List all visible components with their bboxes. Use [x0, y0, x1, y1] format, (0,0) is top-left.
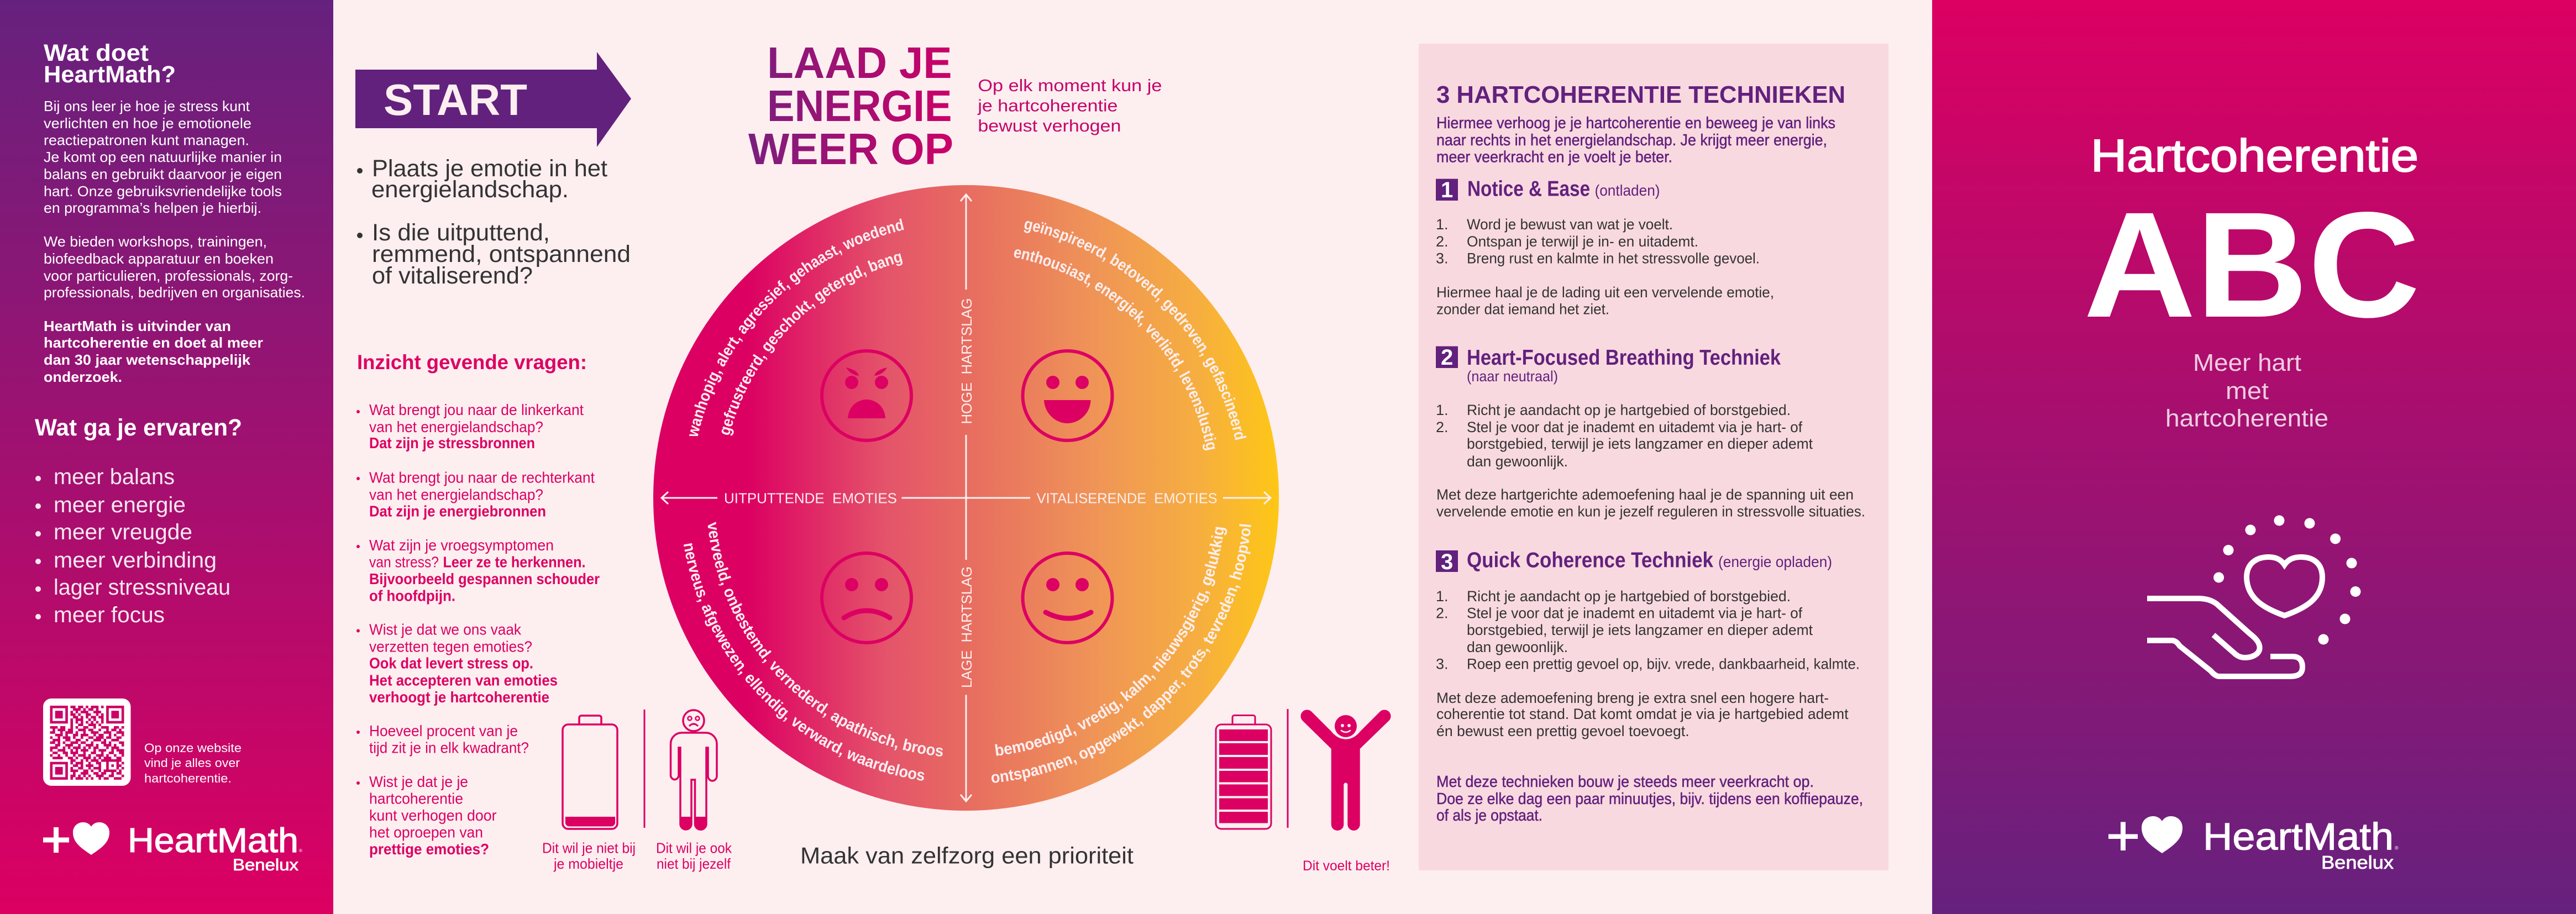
sidebar gradient background	[0, 0, 333, 914]
technique 2: Heart-Focused Breathing: (naar neutraal)	[1467, 368, 1558, 385]
cover title ABC: ABC	[2084, 181, 2420, 349]
list: insight questions: van het energielandschap?	[369, 486, 543, 503]
text: website note	[144, 741, 242, 785]
list: insight questions: prettige emoties?	[369, 841, 489, 858]
technique 1: Notice and Ease: Word je bewust van wat je voelt.	[1467, 216, 1673, 233]
caption: Dit voelt beter: Dit voelt beter!	[1303, 858, 1390, 874]
text block: about HeartMath: verlichten en hoe je emotionele	[44, 115, 251, 132]
text block: start instructions: Plaats je emotie in het	[372, 155, 607, 182]
axis labels: UITPUTTENDE EMOTIES	[724, 490, 897, 506]
icon: laughing face	[1022, 351, 1112, 440]
axis labels: VITALISERENDE EMOTIES	[1037, 490, 1218, 506]
logo: HeartMath Benelux: ®	[299, 848, 302, 853]
technique 3: Quick Coherence: Roep een prettig gevoel op, bijv. vrede, dankbaarheid, kalmte.	[1467, 656, 1860, 673]
technique 2: Heart-Focused Breathing: Heart-Focused Breathing Techniek	[1467, 346, 1781, 370]
circle gradient disc	[653, 185, 1279, 811]
text block: start instructions	[357, 155, 631, 289]
technique 1: Notice and Ease: Notice & Ease	[1467, 177, 1590, 201]
text: Maak van zelfzorg een prioriteit: Maak van zelfzorg een prioriteit	[800, 842, 1134, 869]
technique 3: Quick Coherence: borstgebied, terwijl je iets langzamer en dieper ademt	[1467, 622, 1813, 638]
text block: bold statement	[44, 318, 263, 385]
text block: start instructions: energielandschap.	[371, 176, 569, 203]
heading: Wat doet HeartMath?: Wat doet	[44, 40, 149, 66]
text block: about HeartMath: professionals, bedrijven en organisaties.	[44, 284, 305, 301]
text block: about HeartMath: We bieden workshops, trainingen,	[44, 233, 267, 250]
title: Laad je energie weer op: ENERGIE	[767, 81, 952, 130]
icon: hand holding heart	[2147, 515, 2361, 676]
intro text: naar rechts in het energielandschap. Je krijgt meer energie,	[1436, 132, 1827, 149]
technique 1: Notice and Ease: Hiermee haal je de lading uit een vervelende emotie,	[1436, 284, 1774, 301]
divider: left	[643, 710, 646, 828]
list: insight questions: kunt verhogen door	[369, 807, 496, 824]
title: Laad je energie weer op: LAAD JE	[767, 38, 952, 87]
caption: battery and person	[542, 840, 732, 872]
list: insight questions	[356, 401, 600, 858]
text block: about HeartMath: en programma’s helpen je hierbij.	[44, 199, 261, 216]
list: insight questions: Dat zijn je energiebronnen	[369, 503, 546, 519]
emotion words on arcs: verveeld, onbestemd, vernederd, apathisch, broos	[707, 522, 943, 757]
technique 3: Quick Coherence: Met deze ademoefening breng je extra snel een hogere hart-	[1436, 690, 1829, 706]
chart: energy landscape circle	[653, 185, 1279, 811]
panel background	[1419, 44, 1888, 870]
technique 3: Quick Coherence	[1436, 548, 1860, 739]
list: insight questions: Wat zijn je vroegsymptomen	[369, 537, 554, 554]
icon: full battery	[1216, 715, 1271, 829]
logo: HeartMath Benelux: Benelux	[233, 856, 298, 874]
logo: HeartMath Benelux	[43, 822, 302, 874]
text block: about HeartMath: reactiepatronen kunt managen.	[44, 132, 249, 149]
technique 1: Notice and Ease	[1436, 177, 1774, 317]
list: benefits: meer vreugde	[54, 520, 192, 544]
icon: empty battery	[563, 716, 617, 829]
heading: Inzicht gevende vragen: Inzicht gevende vragen:	[357, 351, 587, 374]
list: insight questions: Wist je dat je je	[369, 773, 468, 790]
technique 1: Notice and Ease: 3.	[1436, 250, 1449, 267]
icon: exhausted person	[671, 710, 717, 829]
cover tagline: hartcoherentie	[2165, 405, 2328, 432]
technique 2: Heart-Focused Breathing: borstgebied, terwijl je iets langzamer en dieper ademt	[1467, 435, 1813, 452]
subtitle: bewust verhogen	[977, 76, 1162, 135]
panel: 3 techniques	[1419, 44, 1888, 870]
emotion words on arcs: enthousiast, energiek, verliefd, levenslustig	[1014, 249, 1216, 450]
list: insight questions: het oproepen van	[369, 824, 483, 841]
emotion words on arcs: bemoedigd, vredig, kalm, nieuwsgierig, gelukkig	[995, 527, 1227, 756]
technique 2: Heart-Focused Breathing: 2	[1441, 345, 1453, 370]
text block: bold statement: hartcoherentie en doet al meer	[44, 334, 263, 351]
cover heading: Hartcoherentie	[2091, 130, 2418, 181]
icon: angry face	[822, 351, 911, 440]
technique 3: Quick Coherence: Stel je voor dat je inademt en uitademt via je hart- of	[1467, 605, 1802, 621]
text block: start instructions: Is die uitputtend,	[372, 219, 550, 246]
list: insight questions: of hoofdpijn.	[369, 587, 455, 605]
list: benefits: meer verbinding	[54, 548, 217, 572]
technique 3: Quick Coherence: 1.	[1436, 588, 1449, 605]
list: insight questions: van het energielandschap?	[369, 418, 543, 435]
list: insight questions: Wat brengt jou naar de rechterkant	[369, 469, 595, 486]
logo: HeartMath Benelux: HeartMath	[2203, 816, 2394, 858]
technique 2: Heart-Focused Breathing: 1.	[1436, 402, 1449, 418]
list: benefits: meer balans	[54, 465, 175, 489]
cover tagline	[2165, 349, 2328, 432]
heading: 3 hartcoherentie technieken: 3 HARTCOHERENTIE TECHNIEKEN	[1436, 81, 1845, 108]
list: insight questions: Bijvoorbeeld gespannen schouder	[369, 570, 600, 587]
emotion words on arcs: ontspannen, opgewekt, dapper, trots, tevreden, hoopvol	[991, 524, 1251, 783]
arrow: START: START	[384, 75, 527, 124]
arrow: START	[355, 52, 631, 147]
logo: HeartMath Benelux: ®	[2395, 845, 2399, 851]
panel: cover	[1932, 0, 2576, 914]
icon: sad face	[822, 553, 911, 643]
caption: battery and person: niet bij jezelf	[657, 855, 731, 872]
panel: left sidebar	[0, 0, 333, 914]
list: insight questions: hartcoherentie	[369, 790, 463, 807]
technique 3: Quick Coherence: dan gewoonlijk.	[1467, 639, 1568, 655]
text block: about HeartMath: balans en gebruikt daarvoor je eigen	[44, 166, 282, 182]
cover tagline: met	[2226, 377, 2269, 405]
text block: about HeartMath: Bij ons leer je hoe je stress kunt	[44, 98, 250, 114]
text block: bold statement: onderzoek.	[44, 369, 122, 385]
subtitle: bewust verhogen: Op elk moment kun je	[978, 76, 1162, 95]
intro text: meer veerkracht en je voelt je beter.	[1436, 148, 1672, 166]
heading: Wat doet HeartMath?: HeartMath?	[44, 61, 176, 88]
technique 3: Quick Coherence: 3	[1441, 550, 1453, 574]
technique 2: Heart-Focused Breathing: Stel je voor dat je inademt en uitademt via je hart- of	[1467, 419, 1802, 435]
list: insight questions: Hoeveel procent van je	[369, 722, 518, 739]
list: insight questions: Dat zijn je stressbronnen	[369, 434, 535, 451]
subtitle: bewust verhogen: bewust verhogen	[978, 116, 1121, 135]
list: insight questions: Wat brengt jou naar de linkerkant	[369, 401, 584, 418]
technique 1: Notice and Ease: zonder dat iemand het ziet.	[1436, 301, 1609, 317]
emotion words on arcs: wanhopig, alert, agressief, gehaast, woedend	[689, 218, 904, 437]
technique 3: Quick Coherence: (energie opladen)	[1718, 553, 1832, 570]
technique 3: Quick Coherence: Quick Coherence Techniek	[1467, 548, 1713, 572]
list: benefits: meer focus	[54, 603, 165, 627]
technique 1: Notice and Ease: 1.	[1436, 216, 1449, 233]
closing advice: Met deze technieken bouw je steeds meer veerkracht op.	[1436, 773, 1814, 791]
text: website note: Op onze website	[144, 741, 242, 755]
title: Laad je energie weer op	[748, 38, 953, 174]
list: insight questions: Het accepteren van emoties	[369, 672, 558, 689]
text block: bold statement: HeartMath is uitvinder van	[44, 318, 231, 334]
list: benefits	[35, 465, 230, 627]
technique 3: Quick Coherence: 2.	[1436, 605, 1449, 621]
icon: energised person	[1300, 710, 1391, 831]
technique 1: Notice and Ease: Ontspan je terwijl je in- en uitademt.	[1467, 233, 1698, 250]
list: insight questions: Leer ze te herkennen.	[443, 554, 586, 571]
technique 3: Quick Coherence: 3.	[1436, 656, 1449, 673]
text block: about HeartMath: voor particulieren, professionals, zorg-	[44, 267, 293, 284]
list: insight questions: tijd zit je in elk kwadrant?	[369, 739, 529, 757]
text block: about HeartMath: Je komt op een natuurlijke manier in	[44, 149, 282, 165]
technique 2: Heart-Focused Breathing: dan gewoonlijk.	[1467, 453, 1568, 470]
logo: HeartMath Benelux: Benelux	[2321, 852, 2394, 873]
list: benefits: lager stressniveau	[54, 575, 230, 600]
cover tagline: Meer hart	[2193, 349, 2301, 376]
text block: start instructions: remmend, ontspannend	[372, 241, 631, 267]
closing advice: of als je opstaat.	[1436, 807, 1543, 824]
technique 2: Heart-Focused Breathing: 2.	[1436, 419, 1449, 435]
axes and arrows	[662, 195, 1271, 801]
text block: about HeartMath	[44, 98, 305, 301]
heading: Wat ga je ervaren?: Wat ga je ervaren?	[35, 414, 242, 441]
axis labels: LAGE HARTSLAG	[958, 566, 975, 688]
emotion words on arcs: gefrustreerd, geschokt, getergd, bang	[722, 253, 903, 435]
caption: battery and person: Dit wil je ook	[656, 840, 732, 857]
technique 2: Heart-Focused Breathing: Met deze hartgerichte ademoefening haal je de spanning uit een	[1436, 486, 1854, 503]
logo: HeartMath Benelux: HeartMath	[128, 822, 298, 860]
technique 3: Quick Coherence: én bewust een prettig gevoel toevoegt.	[1436, 723, 1690, 739]
technique 1: Notice and Ease: 1	[1441, 178, 1453, 202]
list: insight questions: Ook dat levert stress op.	[369, 655, 533, 672]
logo: HeartMath Benelux	[2108, 816, 2399, 873]
list: benefits: meer energie	[54, 493, 186, 517]
technique 1: Notice and Ease: (ontladen)	[1595, 182, 1660, 199]
list: insight questions: verzetten tegen emoties?	[369, 638, 532, 655]
text block: about HeartMath: hart. Onze gebruiksvriendelijke tools	[44, 183, 282, 199]
technique 2: Heart-Focused Breathing: Richt je aandacht op je hartgebied of borstgebied.	[1467, 402, 1791, 418]
text: website note: hartcoherentie.	[144, 771, 232, 785]
caption: battery and person: Dit wil je niet bij	[542, 840, 636, 857]
icon: smiling face	[1022, 553, 1112, 643]
text block: about HeartMath: biofeedback apparatuur en boeken	[44, 250, 274, 267]
technique 2: Heart-Focused Breathing: vervelende emotie en kun je jezelf reguleren in stressvolle situaties.	[1436, 503, 1865, 519]
list: insight questions: verhoogt je hartcoherentie	[369, 689, 549, 706]
emotion words on arcs	[684, 218, 1251, 783]
list: insight questions: Wist je dat we ons vaak	[369, 621, 522, 638]
subtitle: bewust verhogen: je hartcoherentie	[977, 96, 1118, 115]
divider: right	[1287, 709, 1289, 828]
icon: QR code	[43, 698, 130, 786]
axis labels: HOGE HARTSLAG	[958, 298, 975, 424]
list: insight questions: van stress?	[369, 554, 439, 571]
cover gradient background	[1932, 0, 2576, 914]
caption: battery and person: je mobieltje	[553, 855, 623, 872]
text block: start instructions: of vitaliserend?	[372, 262, 533, 289]
closing advice: Doe ze elke dag een paar minuutjes, bijv. tijdens een koffiepauze,	[1436, 790, 1863, 808]
emotion words on arcs: nerveus, afgewezen, ellendig, verward, waardeloos	[684, 543, 924, 781]
closing advice	[1436, 773, 1863, 824]
technique 3: Quick Coherence: coherentie tot stand. Dat komt omdat je via je hartgebied ademt	[1436, 706, 1849, 722]
intro text: Hiermee verhoog je je hartcoherentie en beweeg je van links	[1436, 114, 1835, 132]
text block: bold statement: dan 30 jaar wetenschappelijk	[44, 351, 251, 368]
axis labels	[724, 298, 1218, 688]
heading: Wat doet HeartMath?	[44, 40, 176, 88]
technique 2: Heart-Focused Breathing	[1436, 345, 1865, 519]
intro text	[1436, 114, 1835, 166]
emotion words on arcs: geïnspireerd, betoverd, gedreven, gefascineerd	[1024, 221, 1247, 440]
technique 1: Notice and Ease: Breng rust en kalmte in het stressvolle gevoel.	[1467, 250, 1760, 267]
title: Laad je energie weer op: WEER OP	[748, 124, 953, 174]
technique 3: Quick Coherence: Richt je aandacht op je hartgebied of borstgebied.	[1467, 588, 1791, 605]
technique 1: Notice and Ease: 2.	[1436, 233, 1449, 250]
text: website note: vind je alles over	[144, 756, 240, 770]
